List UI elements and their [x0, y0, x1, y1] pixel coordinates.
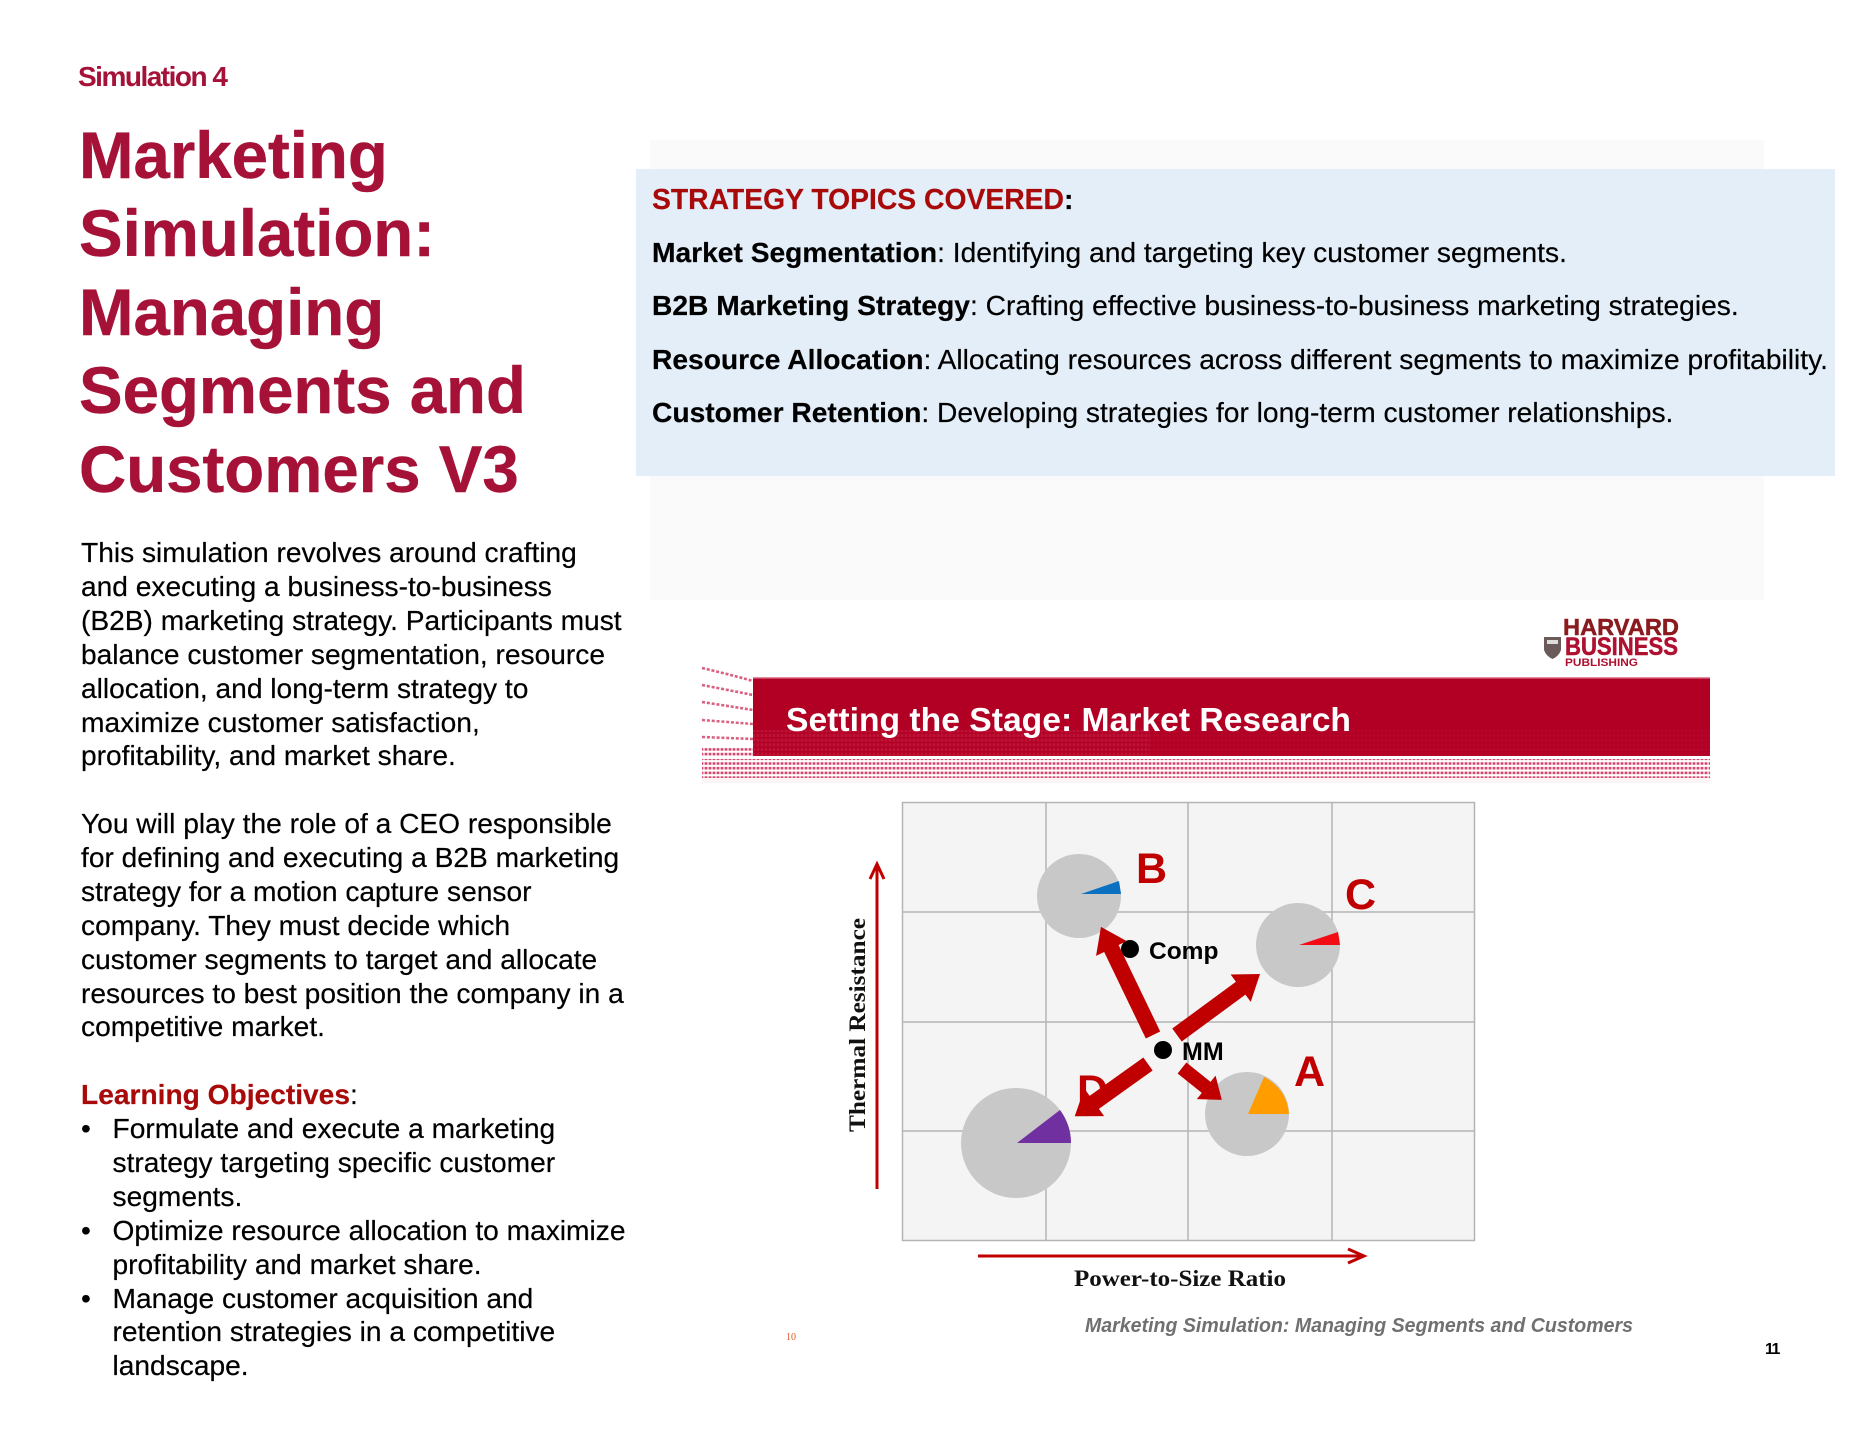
y axis label: Thermal Resistance	[845, 918, 870, 1132]
text block: intro paragraph: This simulation revolves around crafting	[81, 537, 577, 568]
list: learning objectives bullets: segments.	[112, 1181, 242, 1212]
list: learning objectives bullets: •	[81, 1113, 91, 1144]
list: learning objectives bullets: landscape.	[112, 1350, 249, 1381]
heading: strategy topics: STRATEGY TOPICS COVERED:	[652, 182, 1073, 214]
panel: strategy topics covered	[636, 169, 1835, 476]
banner: setting the stage	[753, 677, 1710, 756]
list: learning objectives bullets: strategy targeting specific customer	[112, 1147, 555, 1178]
list: learning objectives bullets: •	[81, 1215, 91, 1246]
MM dot and label: MM	[1182, 1038, 1224, 1066]
label A: A	[1294, 1048, 1325, 1096]
logo: Harvard Business Publishing: PUBLISHING	[1565, 657, 1638, 669]
logo: Harvard Business Publishing: BUSINESS	[1565, 633, 1678, 661]
x axis label: Power-to-Size Ratio	[1074, 1266, 1286, 1291]
title: Managing	[79, 276, 384, 348]
arrow to C	[1167, 960, 1270, 1049]
list: learning objectives bullets: •	[81, 1283, 91, 1314]
chart: market map	[845, 802, 1474, 1291]
arrow to D	[1065, 1050, 1158, 1130]
text block: role paragraph	[81, 808, 624, 1042]
chart grid	[902, 802, 1474, 1240]
text block: role paragraph: resources to best position the company in a	[81, 978, 624, 1009]
slide number: 10	[786, 1332, 796, 1343]
banner: dotted band under title	[702, 748, 1710, 783]
text block: role paragraph: for defining and executing a B2B marketing	[81, 842, 619, 873]
title	[79, 118, 526, 506]
text block: role paragraph: customer segments to target and allocate	[81, 944, 597, 975]
MM dot and label	[1154, 1038, 1224, 1066]
text block: intro paragraph: (B2B) marketing strategy. Participants must	[81, 605, 622, 636]
list: learning objectives bullets	[81, 1113, 625, 1382]
x axis arrow	[978, 1249, 1364, 1263]
arrow to A	[1173, 1056, 1231, 1112]
text block: role paragraph: competitive market.	[81, 1011, 325, 1042]
topic: B2B marketing strategy: B2B Marketing Strategy: Crafting effective business-to-business marketing strategies.	[652, 288, 1739, 320]
topic: customer retention: Customer Retention: Developing strategies for long-term customer relationships.	[652, 396, 1673, 428]
list: learning objectives bullets: Formulate and execute a marketing	[112, 1113, 555, 1144]
label C: C	[1345, 871, 1376, 919]
list: learning objectives bullets: Optimize resource allocation to maximize	[112, 1215, 625, 1246]
list: learning objectives bullets: profitability and market share.	[112, 1249, 482, 1280]
title: Marketing	[79, 118, 388, 192]
page number: 11	[1765, 1341, 1781, 1358]
title: Customers V3	[79, 432, 519, 506]
text block: role paragraph: company. They must decide which	[81, 910, 510, 941]
label D: D	[1077, 1067, 1108, 1115]
list: learning objectives bullets: Manage customer acquisition and	[112, 1283, 533, 1314]
text block: intro paragraph: profitability, and market share.	[81, 740, 456, 771]
panel: pale background behind topics	[650, 140, 1764, 600]
text block: intro paragraph: maximize customer satisfaction,	[81, 707, 480, 738]
label B: B	[1136, 845, 1167, 893]
competitor dot and label: Comp	[1149, 938, 1218, 965]
arrow to B	[1086, 919, 1168, 1042]
title: Segments and	[79, 354, 526, 427]
text block: role paragraph: strategy for a motion capture sensor	[81, 876, 531, 907]
footer caption: Marketing Simulation: Managing Segments and Customers	[1085, 1314, 1633, 1337]
logo: Harvard Business Publishing	[1544, 614, 1679, 669]
section label: Simulation 4	[78, 61, 226, 92]
segment B pie	[1037, 854, 1121, 938]
logo: Harvard Business Publishing: HARVARD	[1563, 614, 1679, 640]
segment A pie	[1205, 1072, 1289, 1156]
list: learning objectives bullets: retention strategies in a competitive	[112, 1316, 555, 1347]
text block: intro paragraph	[81, 537, 622, 772]
title: Simulation:	[79, 197, 435, 270]
text block: role paragraph: You will play the role of a CEO responsible	[81, 808, 612, 839]
banner: dotted curves at left	[702, 668, 753, 739]
y axis arrow	[870, 864, 884, 1189]
text block: intro paragraph: and executing a business-to-business	[81, 571, 552, 602]
heading: learning objectives: Learning Objectives:	[81, 1079, 358, 1110]
topic: market segmentation: Market Segmentation: Identifying and targeting key customer segments.	[652, 236, 1567, 268]
banner: setting the stage: Setting the Stage: Market Research	[786, 702, 1351, 739]
segment D pie	[961, 1088, 1071, 1198]
text block: intro paragraph: allocation, and long-term strategy to	[81, 673, 528, 704]
topic: resource allocation: Resource Allocation: Allocating resources across different segments to maximize profitability.	[652, 342, 1828, 374]
segment C pie	[1256, 903, 1340, 987]
text block: intro paragraph: balance customer segmentation, resource	[81, 639, 605, 670]
